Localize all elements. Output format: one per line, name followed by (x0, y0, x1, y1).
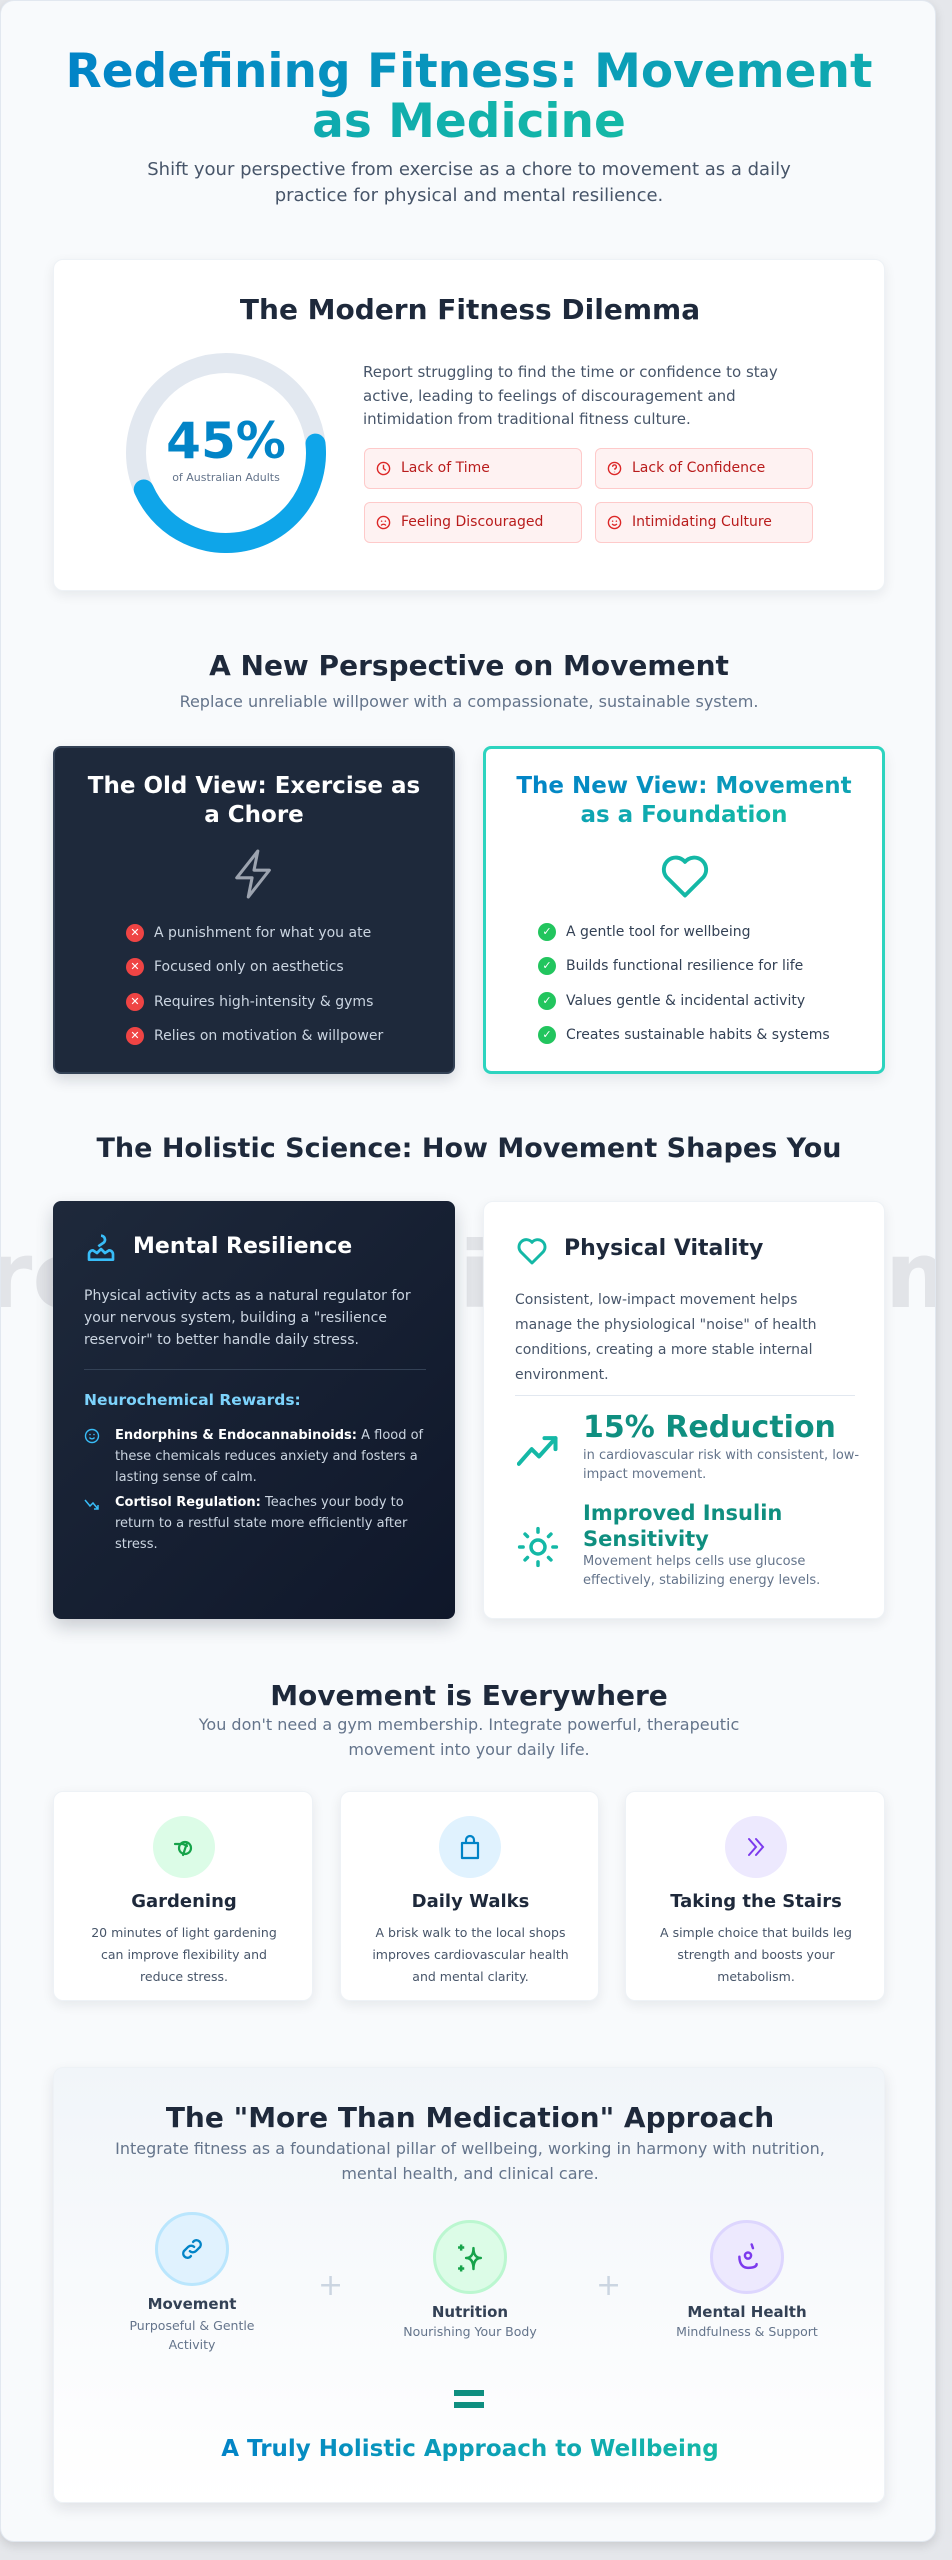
conclusion text: A Truly Holistic Approach to Wellbeing (221, 2436, 719, 2462)
stat: 15% reduction: 15% Reduction (583, 1410, 836, 1445)
list: new view: ✓ (542, 994, 552, 1007)
tag: lack of time (364, 448, 582, 489)
list: old view: Requires high-intensity & gyms (154, 994, 373, 1010)
stat: 15% reduction: in cardiovascular risk with consistent, low-impact movement. (583, 1448, 859, 1482)
list: new view (538, 923, 830, 1044)
pillar: mental health: Mental Health (687, 2303, 807, 2321)
plus sign: + (318, 2268, 343, 2303)
icon: heart (662, 856, 708, 898)
list: old view: ✕ (130, 926, 140, 939)
subheading: Integrate fitness as a foundational pillar of wellbeing, working in harmony with nutrition, mental health, and clinical care. (115, 2139, 825, 2183)
icon: heart (518, 1238, 546, 1264)
icon: double chevron (725, 1816, 787, 1878)
equals sign (454, 2390, 484, 2408)
tag: lack of confidence (595, 448, 813, 489)
panel: more than medication (53, 2067, 885, 2503)
item: cortisol: Cortisol Regulation: Teaches your body to return to a restful state more efficiently after stress. (115, 1495, 407, 1552)
title: as Medicine (312, 94, 626, 149)
pillar: nutrition: Nutrition (432, 2303, 508, 2321)
subtitle: Shift your perspective from exercise as a chore to movement as a daily practice for physical and mental resilience. (147, 159, 791, 206)
paragraph: Consistent, low-impact movement helps manage the physiological "noise" of health conditions, creating a more stable internal environment. (515, 1292, 817, 1383)
tag: feeling discouraged: Feeling Discouraged (401, 514, 543, 530)
icon: shopping bag (439, 1816, 501, 1878)
donut chart 45% (126, 353, 326, 553)
card: daily walks (340, 1791, 599, 2001)
title: Taking the Stairs (670, 1891, 842, 1912)
title: Mental Resilience (133, 1234, 352, 1259)
new view title: as a Foundation (580, 802, 788, 828)
subheading: Replace unreliable willpower with a compassionate, sustainable system. (180, 692, 758, 711)
tag: lack of time: Lack of Time (401, 460, 490, 476)
list: old view (126, 924, 384, 1045)
list: new view: Builds functional resilience for life (566, 958, 803, 974)
list: new view: ✓ (542, 959, 552, 972)
pillar: nutrition (403, 2220, 537, 2339)
description: 20 minutes of light gardening can improve flexibility and reduce stress. (91, 1925, 277, 1984)
list: old view: Relies on motivation & willpower (154, 1028, 383, 1044)
icon: sprout (153, 1816, 215, 1878)
title: Redefining Fitness: Movement (66, 44, 872, 99)
list: new view: Creates sustainable habits & systems (566, 1027, 830, 1043)
pillar: mental health (676, 2220, 818, 2339)
icon: lightning (235, 850, 271, 898)
list: old view: ✕ (130, 995, 140, 1008)
subheading: neurochemical rewards: Neurochemical Rewards: (84, 1391, 301, 1409)
list: new view: A gentle tool for wellbeing (566, 924, 750, 940)
stat: insulin sensitivity (518, 1501, 820, 1588)
old view title: a Chore (204, 802, 304, 828)
stat: insulin sensitivity: Improved Insulin Sensitivity (583, 1501, 782, 1551)
heading: holistic science: The Holistic Science: How Movement Shapes You (96, 1133, 842, 1164)
stat: insulin sensitivity: Movement helps cells use glucose effectively, stabilizing energy levels. (583, 1554, 820, 1588)
pillar: nutrition: Nourishing Your Body (403, 2324, 537, 2339)
heading: new perspective: A New Perspective on Movement (209, 649, 729, 682)
plus sign: + (596, 2268, 621, 2303)
watermark text (0, 1222, 936, 1329)
card: gardening (53, 1791, 313, 2001)
item: endorphins: Endorphins & Endocannabinoids: A flood of these chemicals reduces anxiety and fosters a lasting sense of calm. (115, 1428, 423, 1485)
pillar: mental health: Mindfulness & Support (676, 2324, 818, 2339)
pillar: movement: Purposeful & Gentle Activity (129, 2318, 255, 2352)
paragraph: Physical activity acts as a natural regulator for your nervous system, building a "resilience reservoir" to better handle daily stress. (84, 1288, 411, 1348)
heading: The Modern Fitness Dilemma (240, 293, 700, 326)
heading: The "More Than Medication" Approach (166, 2101, 774, 2134)
pillar: movement: Movement (148, 2295, 236, 2313)
panel: modern fitness dilemma (53, 259, 885, 591)
tag: intimidating culture (595, 502, 813, 543)
panel: mental resilience (53, 1201, 455, 1619)
new view title: The New View: Movement (516, 773, 852, 799)
list: old view: A punishment for what you ate (154, 925, 371, 941)
title: Daily Walks (412, 1891, 529, 1912)
description: Report struggling to find the time or confidence to stay active, leading to feelings of discouragement and intimidation from traditional fitness culture. (363, 363, 778, 428)
old view title (88, 773, 420, 828)
title: Physical Vitality (564, 1236, 763, 1261)
icon: brain/person (88, 1234, 114, 1261)
list: new view: ✓ (542, 1028, 552, 1041)
list: new view: Values gentle & incidental activity (566, 993, 805, 1009)
tag: lack of confidence: Lack of Confidence (632, 460, 765, 476)
watermark text: i (459, 1222, 491, 1329)
donut chart 45%: of Australian Adults (172, 471, 280, 484)
new view title (516, 773, 852, 828)
heading: movement is everywhere: Movement is Everywhere (270, 1679, 668, 1712)
subheading: You don't need a gym membership. Integrate powerful, therapeutic movement into your daily life. (199, 1715, 739, 1759)
title: Gardening (131, 1891, 237, 1912)
list: new view: ✓ (542, 925, 552, 938)
pillar: movement (129, 2212, 255, 2352)
list: old view: ✕ (130, 1029, 140, 1042)
old view title: The Old View: Exercise as (88, 773, 420, 799)
description: A brisk walk to the local shops improves cardiovascular health and mental clarity. (372, 1925, 569, 1984)
panel: new view (483, 746, 885, 1074)
stat: 15% reduction (517, 1410, 859, 1482)
panel: physical vitality (483, 1201, 885, 1619)
list: old view: ✕ (130, 960, 140, 973)
list: old view: Focused only on aesthetics (154, 959, 344, 975)
title (66, 44, 872, 149)
card: taking the stairs (625, 1791, 885, 2001)
tag: intimidating culture: Intimidating Culture (632, 514, 772, 530)
description: A simple choice that builds leg strength and boosts your metabolism. (660, 1925, 852, 1984)
panel: old view (53, 746, 455, 1074)
donut chart 45%: 45% (166, 412, 286, 470)
tag: feeling discouraged (364, 502, 582, 543)
